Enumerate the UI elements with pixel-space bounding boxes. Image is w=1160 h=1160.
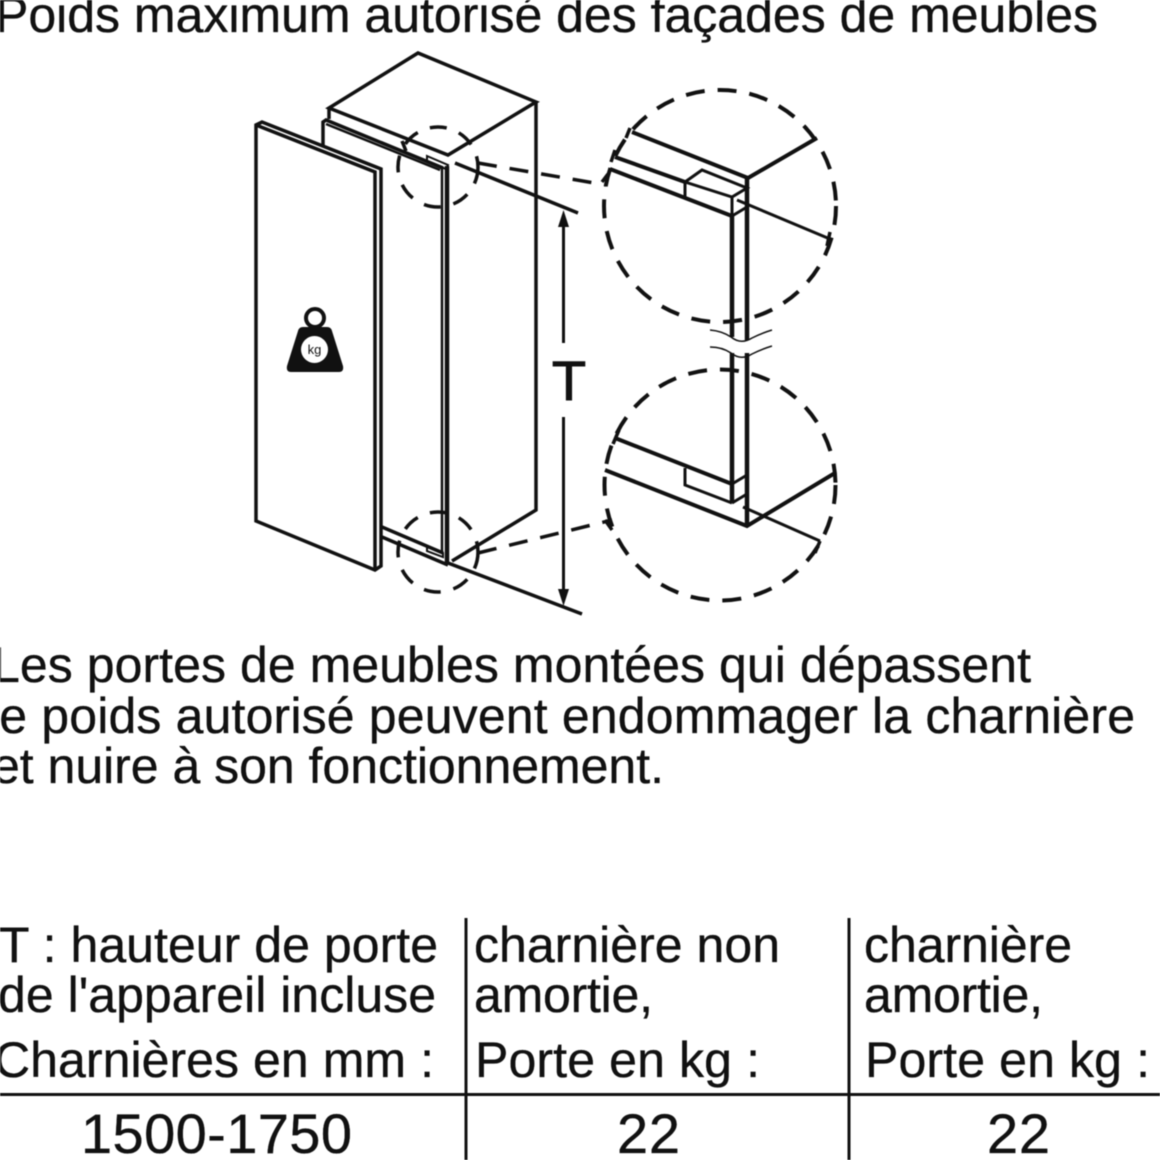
column header: damped hinge [864, 917, 1150, 1088]
dimension: top reference line [455, 163, 578, 213]
connector: top dashed leader [478, 163, 606, 185]
arrow: dimension T [558, 210, 569, 606]
warning text: Les portes de meubles montées qui dépassent [0, 637, 1031, 693]
dimension: bottom reference line [448, 563, 582, 614]
icon: kg weight [287, 309, 343, 372]
icon: break mark [710, 330, 772, 357]
warning text [0, 637, 1135, 794]
column header: non-damped hinge [474, 917, 780, 1088]
diagram: appliance with furniture door [256, 53, 612, 614]
column header: height: de l'appareil incluse [0, 967, 436, 1023]
column header: non-damped hinge: amortie, [474, 967, 653, 1023]
column header: damped hinge: Porte en kg : [865, 1032, 1150, 1088]
panel: appliance cabinet [323, 53, 536, 565]
column header: damped hinge: charnière [864, 917, 1072, 973]
detail: top hinge enlargement [602, 90, 836, 340]
connector: bottom dashed leader [478, 520, 612, 553]
column header: non-damped hinge: Porte en kg : [475, 1032, 760, 1088]
column header: non-damped hinge: charnière non [474, 917, 780, 973]
column header: height: T : hauteur de porte [0, 917, 438, 973]
warning text: le poids autorisé peuvent endommager la charnière [0, 688, 1135, 744]
detail: bottom hinge enlargement [604, 353, 836, 600]
warning text: et nuire à son fonctionnement. [0, 738, 664, 794]
label: T: T [552, 349, 586, 412]
callout: bottom hinge circle [398, 512, 478, 592]
row values [81, 1102, 1050, 1160]
callout: top hinge circle [398, 127, 478, 207]
icon: kg weight: kg [308, 342, 321, 357]
table: door weights [0, 917, 1160, 1160]
panel: furniture door [256, 122, 381, 570]
column header: height: Charnières en mm : [0, 1032, 434, 1088]
table grid [0, 918, 1160, 1160]
column header: height [0, 917, 438, 1088]
column header: damped hinge: amortie, [864, 967, 1043, 1023]
